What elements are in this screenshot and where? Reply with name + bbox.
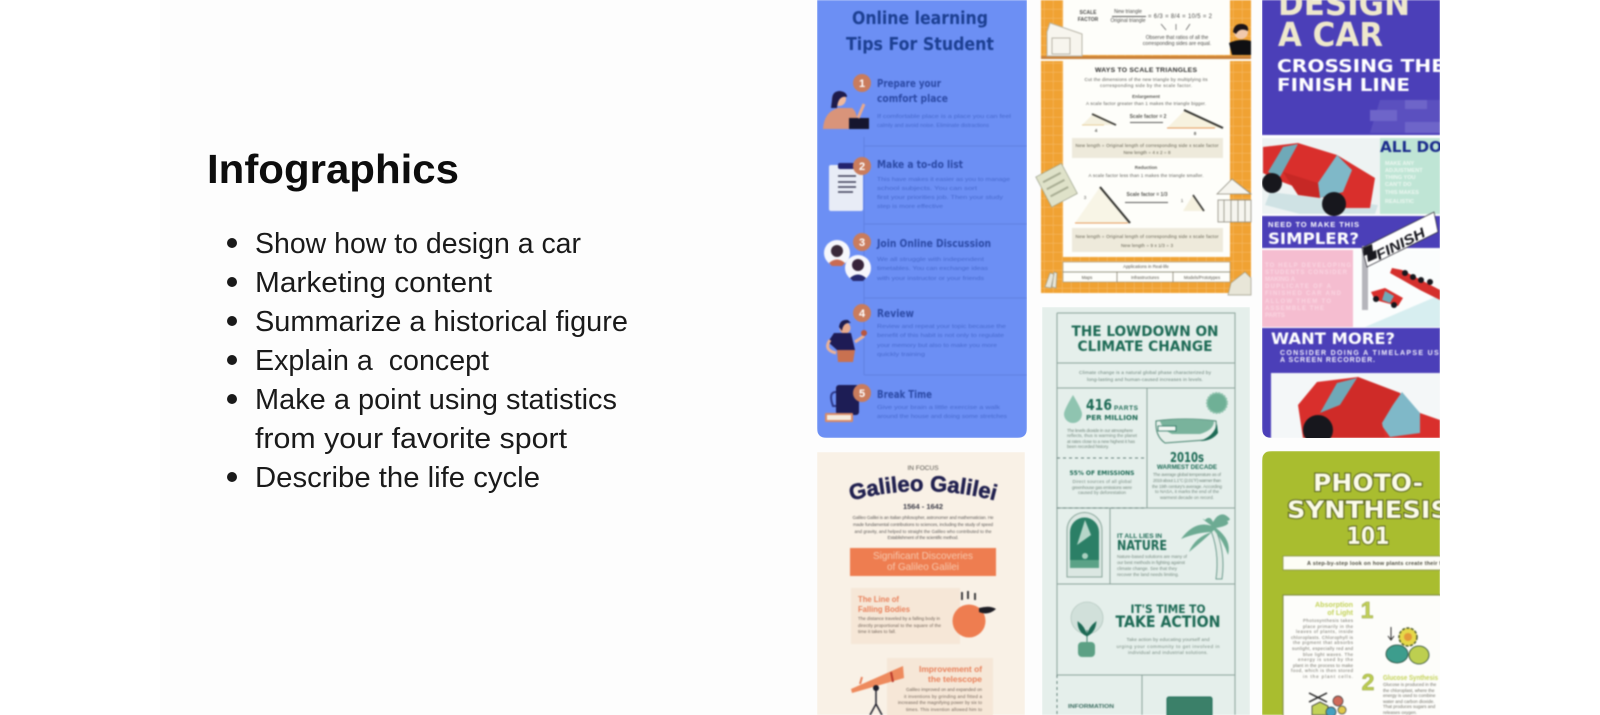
tip 2: This have makes it easier as you to manage <box>877 177 1010 183</box>
panel: galileo galilei <box>817 452 1025 715</box>
step 1: Absorption <box>1315 602 1353 609</box>
text: nature: recover the land needs limiting. <box>1117 572 1179 577</box>
card: telescope improvement: the telescope <box>928 674 982 684</box>
new length box 2: New length = 9 x 1/3 = 3 <box>1121 243 1173 248</box>
stat: warmest decade: The average global temperature as of <box>1153 472 1222 477</box>
bullet list: from your favorite sport <box>255 423 567 455</box>
tip 3: We all struggle with independent <box>877 257 985 263</box>
new length box 1: New length = Original length of corresponding side x scale factor <box>1076 143 1219 148</box>
heading: photo-synthesis 101 <box>1287 469 1449 550</box>
tip 5: around the house and doing some stretches <box>877 414 1007 420</box>
card: falling bodies: The distance traveled by a falling body in <box>858 616 940 621</box>
enlargement section: 8 <box>1194 131 1197 136</box>
finish line scene: FINISH <box>1373 224 1428 263</box>
pink text box: ALLOW THEM TO <box>1265 299 1331 305</box>
band: need to make this simpler: NEED TO MAKE THIS <box>1268 220 1359 229</box>
text: nature: our best methods in fighting against <box>1117 560 1186 565</box>
all done box: CAN'T DO <box>1385 182 1412 188</box>
step 2: Glucose Synthesis <box>1383 675 1438 682</box>
panel: design a car <box>1262 0 1456 445</box>
heading: design a car: A CAR <box>1278 15 1383 54</box>
tip 5: Give your brain a little exercise a walk <box>877 405 1000 411</box>
enlargement section: Scale factor = 2 <box>1130 114 1167 120</box>
banner: significant discoveries: of Galileo Galilei <box>887 561 959 573</box>
finish line scene <box>1353 212 1440 327</box>
stat: 416 parts per million <box>1064 395 1139 449</box>
scale factor formula <box>1078 9 1213 47</box>
card: falling bodies <box>851 588 960 644</box>
band: need to make this simpler <box>1262 216 1440 248</box>
card: telescope improvement <box>887 658 993 715</box>
step 1: blue light waves. The <box>1303 652 1353 657</box>
heading: online learning: Tips For Student <box>846 34 994 55</box>
heading: photo-synthesis 101: SYNTHESIS <box>1287 496 1449 524</box>
stat: 416 parts per million: been recorded history. <box>1067 444 1109 449</box>
icon: window arch <box>1067 512 1102 577</box>
applications table: Models/Prototypes <box>1184 275 1221 280</box>
text: nature: Nature-based solutions are many of <box>1117 554 1188 559</box>
pink text box: MAKING A <box>1265 277 1296 283</box>
card: falling bodies: directly proportional to the square of the <box>858 623 941 628</box>
reduction section <box>1075 165 1205 223</box>
pink text box: FINISHED CAR AND <box>1265 291 1342 297</box>
step 1: chloroplasts. Chlorophyll is <box>1291 635 1354 640</box>
all done box: MAKE ANY <box>1385 161 1414 167</box>
step 1: of Light <box>1327 610 1354 617</box>
card: falling bodies: Falling Bodies <box>858 604 910 614</box>
pink text box <box>1262 250 1353 327</box>
tip 4: Review <box>877 307 914 320</box>
scale factor formula: Observe that ratios of all the <box>1146 35 1208 41</box>
tip 1: 1 <box>859 78 865 90</box>
stat: warmest decade: the 19th century's average. According <box>1152 484 1222 489</box>
bullet list: Explain a concept <box>255 345 489 377</box>
icon: palm tree <box>1181 514 1230 579</box>
all done box: ALL DO <box>1380 138 1442 156</box>
bullet list: Marketing content <box>255 267 492 299</box>
tip 4: quickly training <box>877 352 925 358</box>
heading: ways to scale triangles: WAYS TO SCALE TRIANGLES <box>1095 67 1197 74</box>
icon: molecules <box>1309 693 1346 715</box>
tip 1: comfort place <box>877 92 948 105</box>
step 1: 1 <box>1361 597 1374 623</box>
all done box: REALISTIC <box>1385 199 1414 205</box>
card: telescope improvement: it inventions by grinding and fitted a <box>904 694 982 699</box>
applications table: Infrastructures <box>1131 275 1160 280</box>
icon: apple <box>952 591 996 638</box>
text: nature: climate change. See that they <box>1117 566 1178 571</box>
all done box: THING YOU <box>1385 175 1415 181</box>
icon: sun <box>1207 393 1227 413</box>
icon: light bulb plant <box>1071 602 1103 657</box>
tip 5 <box>825 384 1007 422</box>
card: telescope improvement: times. This invention allowed him to <box>906 707 982 712</box>
white content panel <box>1283 595 1443 715</box>
heading: design a car <box>1278 0 1408 48</box>
pink text box: STUDENTS CONSIDER <box>1265 270 1348 276</box>
intro text: Galileo Galilei is an Italian philosopher, astronomer and mathematician. He <box>852 515 994 520</box>
heading: lowdown on climate change: CLIMATE CHANGE <box>1078 339 1212 355</box>
tip 2: school subjects. You can sort <box>877 186 978 192</box>
scale factor formula: FACTOR <box>1078 17 1099 23</box>
bullet list <box>227 228 628 494</box>
step 2: releases oxygen. <box>1383 710 1417 715</box>
stat: 416 parts per million: The levels dioxide in our atmosphere <box>1067 428 1133 433</box>
applications table: Applications in Real-life <box>1123 264 1169 269</box>
action text <box>1116 637 1220 656</box>
stat: warmest decade: to NASA, it marks the end of the <box>1155 489 1219 494</box>
information source: INFORMATION <box>1068 704 1114 710</box>
reduction section: 1 <box>1181 198 1184 203</box>
stat: 416 parts per million: PARTS <box>1114 405 1139 412</box>
doodle: building <box>1217 179 1251 222</box>
reduction section: Scale factor = 1/3 <box>1126 192 1168 198</box>
heading: photo-synthesis 101: PHOTO- <box>1313 469 1423 497</box>
stat: warmest decade: WARMEST DECADE <box>1157 465 1217 471</box>
car illustration 2 <box>1271 373 1440 445</box>
text: nature: NATURE <box>1117 539 1167 554</box>
tip 3 <box>824 233 991 282</box>
step 1: the pigment that absorbs <box>1293 640 1354 645</box>
tip 4 <box>828 304 1006 362</box>
pink text box: ASSEMBLE THE <box>1265 306 1324 312</box>
step 1: plant in the process to make <box>1293 663 1353 668</box>
card: telescope improvement: Improvement of <box>919 664 982 674</box>
bullet list: Describe the life cycle <box>255 462 540 494</box>
stat: emissions <box>1070 470 1134 495</box>
card: telescope improvement: Galileo improved on and expanded on <box>906 687 982 692</box>
scale factor formula: corresponding sides are equal. <box>1143 41 1211 47</box>
action text: Take action by educating yourself and <box>1126 637 1210 643</box>
intro text: made fundamental contributions to sciences, including the study of speed <box>853 522 993 527</box>
step 2: 2 <box>1362 669 1374 695</box>
subheading: crossing the finish line: FINISH LINE <box>1277 75 1410 96</box>
scale factor formula: = 6/3 = 8/4 = 10/5 = 2 <box>1148 14 1213 20</box>
bullet list: Make a point using statistics <box>255 384 617 416</box>
tip 4: 4 <box>859 308 866 320</box>
icon: melting land <box>1156 419 1218 443</box>
reduction section: 3 <box>1084 195 1087 200</box>
new length box 2: New length = Original length of corresponding side x scale factor <box>1076 234 1219 239</box>
intro text: long-lasting and human-caused increases in levels. <box>1087 377 1203 383</box>
step 2: energy is used to combine <box>1383 693 1436 698</box>
pink text box: TO HELP DEVELOPING <box>1265 263 1351 269</box>
tip 3: timetables. You can exchange ideas <box>877 266 988 272</box>
subtitle bar <box>1283 556 1452 570</box>
doodle: banknotes <box>1036 163 1077 207</box>
subtitle bar: A step-by-step look on how plants create their food <box>1307 561 1452 567</box>
reduction section: Reduction <box>1135 165 1157 170</box>
doodle: person <box>1229 24 1251 55</box>
tip 3: with your instructor or your friends <box>876 276 984 282</box>
panel: photosynthesis <box>1262 451 1452 715</box>
banner: significant discoveries <box>850 548 996 576</box>
banner: significant discoveries: Significant Discoveries <box>873 550 973 562</box>
enlargement section <box>1082 77 1223 136</box>
step 1: sunlight, especially red and <box>1292 646 1353 651</box>
intro text <box>852 515 994 540</box>
tip 3: 3 <box>859 237 865 249</box>
pink text box: DUPLICATE OF A <box>1265 284 1332 290</box>
heading: online learning: Online learning <box>852 8 988 29</box>
tip 4: Review and repeat your topic because the <box>877 324 1006 330</box>
step 1: place primarily in the <box>1303 624 1353 629</box>
enlargement section: corresponding side by the scale factor. <box>1100 83 1192 88</box>
new length box 2 <box>1072 228 1223 252</box>
new length box 1: New length = 4 x 2 = 8 <box>1124 150 1171 155</box>
applications table: Maps <box>1082 275 1093 280</box>
enlargement section: Enlargement <box>1132 94 1160 99</box>
stat: 416 parts per million: reflects, thus is warming the planet <box>1067 433 1138 438</box>
enlargement section: 4 <box>1095 128 1098 133</box>
step 1: energy is used by the <box>1298 657 1353 662</box>
stat: warmest decade: 2019 about 1.1°C (2.01°F) warmer than <box>1153 478 1221 483</box>
all done box: ADJUSTMENT <box>1385 168 1423 174</box>
intro text: Climate change is a natural global phase characterized by <box>1079 370 1212 376</box>
tip 3: Join Online Discussion <box>876 237 991 250</box>
panel: climate change <box>1042 307 1250 715</box>
panel: online learning tips <box>817 0 1027 438</box>
action text: individual and industrial solutions. <box>1128 650 1208 656</box>
stat: 416 parts per million: 416 <box>1086 396 1112 414</box>
text: take action: TAKE ACTION <box>1116 612 1220 631</box>
text: take action: IT'S TIME TO <box>1130 602 1206 616</box>
heading: photo-synthesis 101: 101 <box>1346 522 1390 550</box>
intro text <box>1079 370 1212 383</box>
icon: monitor <box>1167 697 1212 715</box>
new length box 1 <box>1072 138 1223 158</box>
tip 2: step is more effective <box>877 204 943 210</box>
enlargement section: Cut the dimensions of the new triangle by multiplying its <box>1084 77 1208 82</box>
enlargement section: A scale factor greater than 1 makes the triangle bigger. <box>1086 101 1206 106</box>
panel: galileo galilei: 1564 - 1642 <box>903 502 943 511</box>
step 2: the chloroplast, where the <box>1383 688 1435 693</box>
card: telescope improvement: increased the magnifying power by six to <box>898 700 982 705</box>
intro text: and gravity, and helped to straight the Galileo who contributed to the <box>854 529 992 534</box>
doodle: coins and pencils <box>1045 272 1251 295</box>
card: falling bodies: The Line of <box>858 594 899 604</box>
stat: 416 parts per million: at rates close to a new highest it has <box>1067 439 1136 444</box>
stat: warmest decade: warmest decade on record. <box>1160 495 1214 500</box>
step 1: Photosynthesis takes <box>1303 618 1354 623</box>
section: want more: A SCREEN RECORDER. <box>1280 357 1375 364</box>
band: need to make this simpler: SIMPLER? <box>1268 229 1359 248</box>
stat: emissions: caused by deforestation <box>1078 490 1126 495</box>
section: want more: CONSIDER DOING A TIMELAPSE USING <box>1280 350 1456 357</box>
tip 4: benefit of this habit is not only to regulate <box>877 333 1004 339</box>
heading: lowdown on climate change: THE LOWDOWN ON <box>1072 324 1218 340</box>
stat: warmest decade <box>1152 451 1222 500</box>
section: want more <box>1262 328 1456 438</box>
step 2 <box>1362 669 1438 715</box>
panel: galileo galilei: IN FOCUS <box>907 465 939 472</box>
car illustration 1 <box>1262 138 1380 216</box>
stat: warmest decade: 2010s <box>1170 451 1204 466</box>
icon: flower and leaves <box>1386 627 1429 664</box>
tip 2 <box>829 157 1010 211</box>
section: want more: WANT MORE? <box>1271 329 1395 348</box>
step 1: in the plant cells. <box>1303 674 1353 679</box>
stat: emissions: Direct sources of all global <box>1072 479 1132 484</box>
stat: emissions: 55% OF EMISSIONS <box>1070 470 1134 477</box>
icon: telescope <box>851 666 904 715</box>
subheading: crossing the finish line <box>1277 58 1440 92</box>
stat: emissions: greenhouse gas emissions were <box>1072 485 1132 490</box>
all done box: THIS MAKES <box>1385 190 1419 196</box>
scale factor formula: SCALE <box>1080 10 1097 16</box>
reduction section: A scale factor less than 1 makes the triangle smaller. <box>1088 173 1204 178</box>
scale factor formula: Original triangle <box>1110 18 1146 24</box>
text: nature: IT ALL LIES IN <box>1117 533 1162 540</box>
step 2: Glucose is produced in the <box>1383 682 1437 687</box>
step 1: food, which is then stored <box>1291 668 1353 673</box>
step 2: That produces sugars and <box>1383 704 1436 709</box>
text: nature <box>1117 533 1188 577</box>
subheading: crossing the finish line: CROSSING THE <box>1277 56 1445 77</box>
title: Infographics <box>207 146 459 192</box>
tip 1 <box>823 74 1011 129</box>
tip 2: 2 <box>859 161 865 173</box>
pink text box: PARTS <box>1265 313 1285 319</box>
scale factor formula: New triangle <box>1114 9 1142 15</box>
text: take action <box>1114 604 1220 628</box>
tip 4: your memory but also to make you more <box>877 343 997 349</box>
tip 1: If comfortable place is a place you can feel <box>877 114 1011 120</box>
panel: scale triangles <box>1036 0 1251 295</box>
action text: urging your community to get involved in <box>1116 644 1220 650</box>
step 1: leaves of plants, inside <box>1296 629 1353 634</box>
heading: galileo galilei: Galileo Galilei <box>848 474 998 502</box>
intro text: Establishment of the scientific method. <box>888 535 958 540</box>
step 1 <box>1291 597 1374 679</box>
step 2: water and carbon dioxide. <box>1383 699 1435 704</box>
tip 5: 5 <box>859 388 865 400</box>
all done box <box>1380 138 1442 214</box>
bullet list: Show how to design a car <box>255 228 581 260</box>
tip 2: Make a to-do list <box>877 158 963 171</box>
heading: lowdown on climate change <box>1070 324 1218 352</box>
doodle: house <box>1047 23 1082 56</box>
checkered track <box>1370 100 1440 133</box>
stat: 416 parts per million: PER MILLION <box>1086 414 1138 422</box>
bullet list: Summarize a historical figure <box>255 306 628 338</box>
tip 1: calmly and avoid noise. Eliminate distractions <box>877 123 989 129</box>
applications table <box>1063 262 1230 282</box>
tip 2: first your priorities job. Then your study <box>877 195 1003 201</box>
heading: online learning <box>846 8 994 55</box>
tip 5: Break Time <box>877 388 932 401</box>
tip 1: Prepare your <box>877 77 941 90</box>
card: falling bodies: time it takes to fall. <box>858 629 896 634</box>
